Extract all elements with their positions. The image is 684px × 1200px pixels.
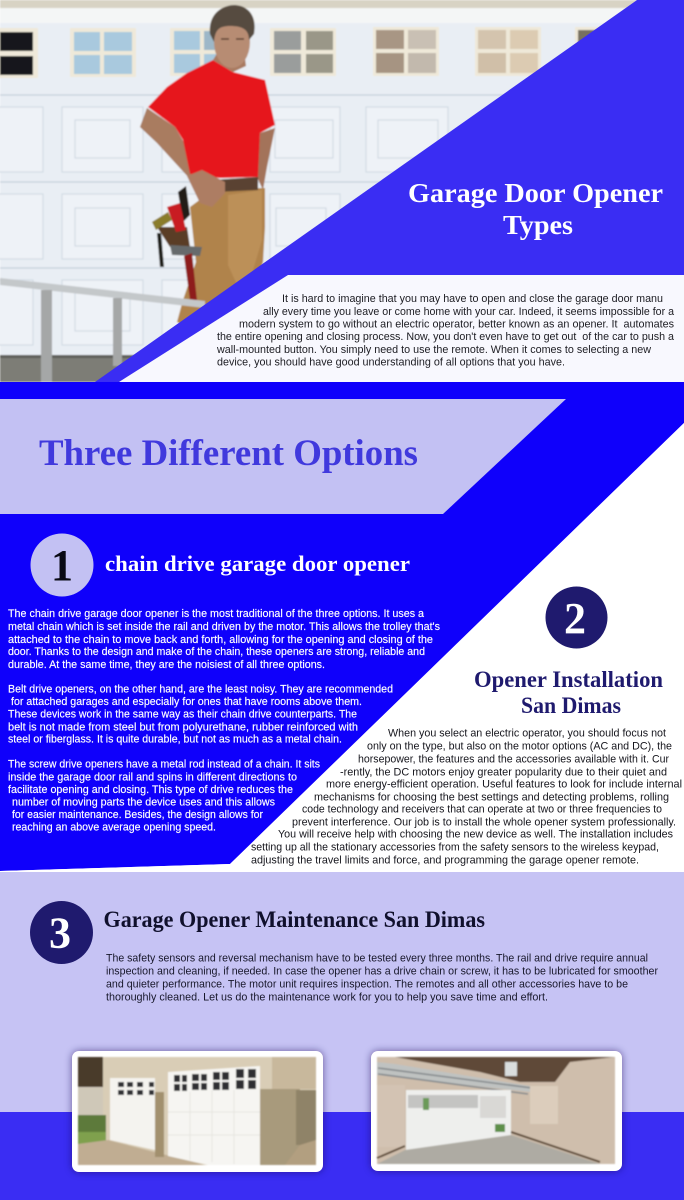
heading: Garage Opener Maintenance San Dimas: Garage Opener Maintenance San Dimas [104, 907, 485, 932]
text: maintenance description: thoroughly cleaned. Let us do the maintenance work for you to help you save time and effort. [106, 992, 548, 1004]
text: chain, belt and screw drive descriptions: attached to the chain to move back and forth, allowing for the opening and closing of the [8, 634, 433, 646]
heading: Opener Installation San Dimas: Opener Installation [474, 667, 663, 692]
blue title triangle [95, 0, 684, 382]
text: maintenance description: inspection and cleaning, if needed. In case the opener has a drive chain or screw, it has to be lubricated for smoother [106, 966, 658, 978]
text: installation description: horsepower, the features and the accessories available with it. Cur [358, 754, 669, 766]
heading: Garage Door Opener Types: Garage Door Opener [408, 178, 663, 208]
door windows [0, 27, 615, 78]
badge: number 1: 1 [51, 541, 73, 590]
text: chain, belt and screw drive descriptions: Belt drive openers, on the other hand, are the least noisy. They are recommended [8, 684, 393, 696]
white panel: section 2 background [0, 423, 684, 872]
footer blue band [0, 1112, 684, 1200]
blue band: section 1 background [0, 382, 684, 871]
badge: number 2: 2 [564, 594, 586, 643]
text: chain, belt and screw drive descriptions: number of moving parts the device uses and this allows [12, 796, 275, 808]
badge: number 3 [30, 901, 93, 964]
text: installation description: mechanisms for choosing the best settings and detecting problems, rolling [314, 792, 669, 804]
text: installation description [251, 728, 682, 866]
banner: Three Different Options [0, 399, 566, 514]
door section lines [0, 95, 684, 345]
text: maintenance description: and quieter performance. The motor unit requires inspection. The remotes and all other accessories have to be [106, 978, 628, 990]
intro text: the entire opening and closing process. Now, you don't even have to get out of the car to push a [217, 331, 674, 343]
heading: Garage Door Opener Types: Types [503, 210, 573, 240]
text: installation description: setting up all the stationary accessories from the safety sensors to the wireless keypad, [251, 842, 659, 854]
text: installation description: adjusting the travel limits and force, and programming the garage opener remote. [251, 854, 639, 866]
text: chain, belt and screw drive descriptions: inside the garage door rail and spins in different directions to [8, 772, 297, 784]
hero photo: man in front of garage door [0, 0, 684, 382]
man [140, 108, 200, 179]
heading: Opener Installation San Dimas: San Dimas [521, 693, 621, 718]
heading: chain drive garage door opener: chain drive garage door opener [105, 551, 410, 576]
tool belt [157, 227, 190, 247]
lavender panel: section 3 background [0, 872, 684, 1112]
text: chain, belt and screw drive descriptions: The chain drive garage door opener is the most traditional of the three options. It uses a [8, 608, 424, 620]
photo card: house with garage doors [72, 1051, 323, 1172]
text: installation description: -rently, the DC motors enjoy greater popularity due to their quiet and [340, 766, 667, 778]
heading: Garage Door Opener Types [408, 178, 663, 240]
text: installation description: code technology and receivers that can operate at two or three frequencies to [302, 804, 662, 816]
badge: number 1 [30, 534, 94, 596]
text: chain, belt and screw drive descriptions: durable. At the same time, they are the noisiest of all three options. [8, 659, 325, 671]
intro text: ally every time you leave or come home with your car. Indeed, it seems impossible for a [263, 306, 674, 318]
text: installation description: only on the type, but also on the motor options (AC and DC), the [367, 740, 672, 752]
text: chain, belt and screw drive descriptions: steel or fiberglass. It is quite durable, but not as much as a metal chain. [8, 734, 342, 746]
text: chain, belt and screw drive descriptions: reaching an above average opening speed. [12, 822, 216, 834]
text: chain, belt and screw drive descriptions: belt is not made from steel but from polyurethane, rubber reinforced with [8, 722, 358, 734]
text: chain, belt and screw drive descriptions: metal chain which is set inside the rail and driven by the motor. This allows the trolley that's [8, 621, 440, 633]
banner: Three Different Options: Three Different Options [39, 433, 418, 474]
text: chain, belt and screw drive descriptions: for attached garages and especially for ones that have rooms above them. [11, 696, 362, 708]
text: chain, belt and screw drive descriptions [8, 608, 440, 834]
badge: number 3: 3 [49, 908, 71, 958]
text: maintenance description [106, 952, 658, 1004]
intro text: modern system to go without an electric operator, better known as an opener. It automates [239, 318, 674, 330]
photo card: garage interior [371, 1051, 622, 1171]
text: chain, belt and screw drive descriptions: for easier maintenance. Besides, the design allows for [12, 809, 263, 821]
text: chain, belt and screw drive descriptions: The screw drive openers have a metal rod instead of a chain. It sits [8, 758, 320, 770]
text: installation description: more energy-efficient operation. Useful features to look for include internal [326, 778, 682, 790]
text: chain, belt and screw drive descriptions: facilitate opening and closing. This type of drive reduces the [8, 784, 293, 796]
text: installation description: When you select an electric operator, you should focus not [388, 728, 666, 740]
intro text: wall-mounted button. You simply need to use the remote. When it comes to selecting a new [216, 344, 651, 356]
ladder [0, 278, 205, 308]
heading: Opener Installation San Dimas [474, 667, 663, 718]
text: installation description: You will receive help with choosing the new device as well. The installation includes [278, 828, 673, 840]
text: chain, belt and screw drive descriptions: These devices work in the same way as their chain drive counterparts. The [8, 708, 357, 720]
intro white panel [119, 275, 684, 382]
text: chain, belt and screw drive descriptions: door. Thanks to the design and make of the chain, these openers are strong, reliable and [8, 646, 425, 658]
text: maintenance description: The safety sensors and reversal mechanism have to be tested every three months. The rail and drive require annual [106, 952, 648, 964]
intro text: device, you should have good understanding of all options that you have. [217, 356, 565, 368]
intro text [216, 293, 674, 368]
badge: number 2 [546, 586, 608, 648]
text: installation description: prevent interference. Our job is to install the whole opener system professionally. [292, 816, 676, 828]
intro text: It is hard to imagine that you may have to open and close the garage door manu [282, 293, 663, 305]
